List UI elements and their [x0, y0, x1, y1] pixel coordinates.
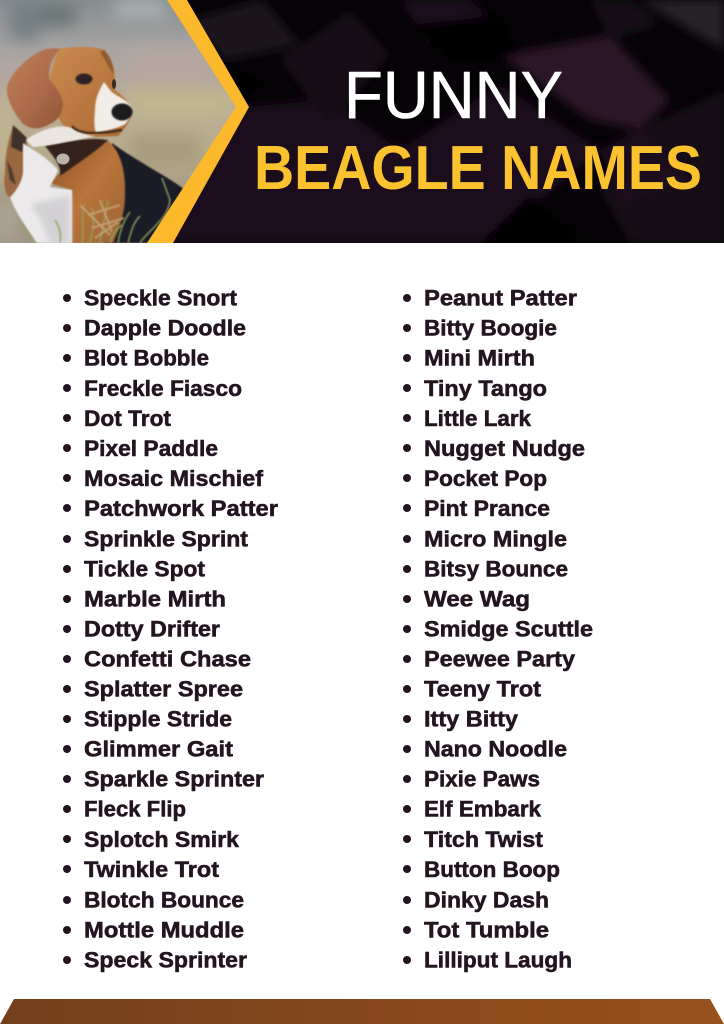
names list: left column: Splotch Smirk	[84, 827, 240, 852]
dark abstract background panel	[160, 0, 724, 243]
grass	[20, 178, 170, 243]
title: funny: FUNNY	[344, 58, 563, 133]
names list: right column: Elf Embark	[424, 796, 542, 822]
names list: right column: Bitty Boogie	[424, 316, 557, 340]
names list: left column: Dot Trot	[84, 406, 172, 431]
names list: right column: Peewee Party	[424, 646, 576, 672]
dog collar	[45, 139, 108, 176]
names list: left column: Speck Sprinter	[84, 948, 247, 972]
names list: left column: Twinkle Trot	[84, 857, 220, 882]
dog head	[50, 47, 132, 137]
names list: right column: Pocket Pop	[424, 466, 547, 491]
names list: right column: Tiny Tango	[424, 376, 547, 401]
names list: left column: Blotch Bounce	[84, 888, 244, 912]
names list: left column: Marble Mirth	[84, 586, 226, 612]
dog nose	[112, 104, 132, 120]
dog collar tag	[56, 154, 70, 164]
dog white neck	[26, 126, 96, 147]
dog mouth line	[72, 126, 122, 133]
names list: left column: Fleck Flip	[84, 796, 186, 822]
names list: right column: Wee Wag	[424, 586, 530, 612]
dog body tan	[50, 140, 125, 243]
names list: left column: Sparkle Sprinter	[84, 766, 264, 792]
dog ear	[7, 48, 63, 128]
names list: right column: Tot Tumble	[424, 918, 549, 942]
names list: right column: Itty Bitty	[424, 706, 519, 732]
names list: left column: Pixel Paddle	[84, 436, 218, 461]
names list: right column: Bitsy Bounce	[424, 556, 568, 582]
names list: left column: Stipple Stride	[84, 706, 232, 732]
names list: left column: Blot Bobble	[84, 346, 209, 370]
names list: left column: Dotty Drifter	[84, 616, 220, 642]
names list: left column: Patchwork Patter	[84, 496, 278, 521]
header banner	[0, 0, 724, 243]
icon: beagle dog	[4, 47, 184, 243]
names list: right column	[403, 286, 593, 972]
dog white chest	[10, 143, 72, 243]
names list: left column: Sprinkle Sprint	[84, 526, 249, 552]
names list: left column: Mosaic Mischief	[84, 466, 264, 491]
names list: right column: Button Boop	[424, 857, 560, 882]
dog eye	[76, 74, 92, 84]
names list: right column: Nano Noodle	[424, 736, 567, 762]
names list: right column: Peanut Patter	[424, 286, 577, 310]
names list: left column: Splatter Spree	[84, 676, 243, 702]
names list: right column: Pixie Paws	[424, 766, 540, 792]
names list: left column: Freckle Fiasco	[84, 376, 242, 401]
names list: right column: Dinky Dash	[424, 888, 549, 912]
footer bar	[0, 999, 724, 1024]
names list: left column: Speckle Snort	[84, 286, 238, 310]
names list: right column: Nugget Nudge	[424, 436, 585, 461]
names list: right column: Titch Twist	[424, 827, 544, 852]
dog white muzzle	[94, 82, 131, 133]
names list: right column: Pint Prance	[424, 496, 550, 521]
photo background	[0, 0, 250, 243]
names list: right column: Smidge Scuttle	[424, 616, 593, 642]
names list: right column: Lilliput Laugh	[424, 948, 572, 972]
names list: right column: Teeny Trot	[424, 676, 542, 702]
names list: left column	[63, 286, 278, 972]
names list: left column: Glimmer Gait	[84, 736, 234, 762]
names list: left column: Confetti Chase	[84, 646, 251, 672]
dog black saddle	[105, 143, 184, 243]
names list: left column: Tickle Spot	[84, 556, 206, 582]
names list: left column: Dapple Doodle	[84, 316, 246, 340]
names list: right column: Micro Mingle	[424, 526, 567, 552]
yellow chevron	[147, 0, 249, 243]
names list: right column: Little Lark	[424, 406, 532, 431]
dog shoulder	[4, 127, 28, 198]
names list: right column: Mini Mirth	[424, 346, 535, 370]
names list: left column: Mottle Muddle	[84, 918, 244, 942]
